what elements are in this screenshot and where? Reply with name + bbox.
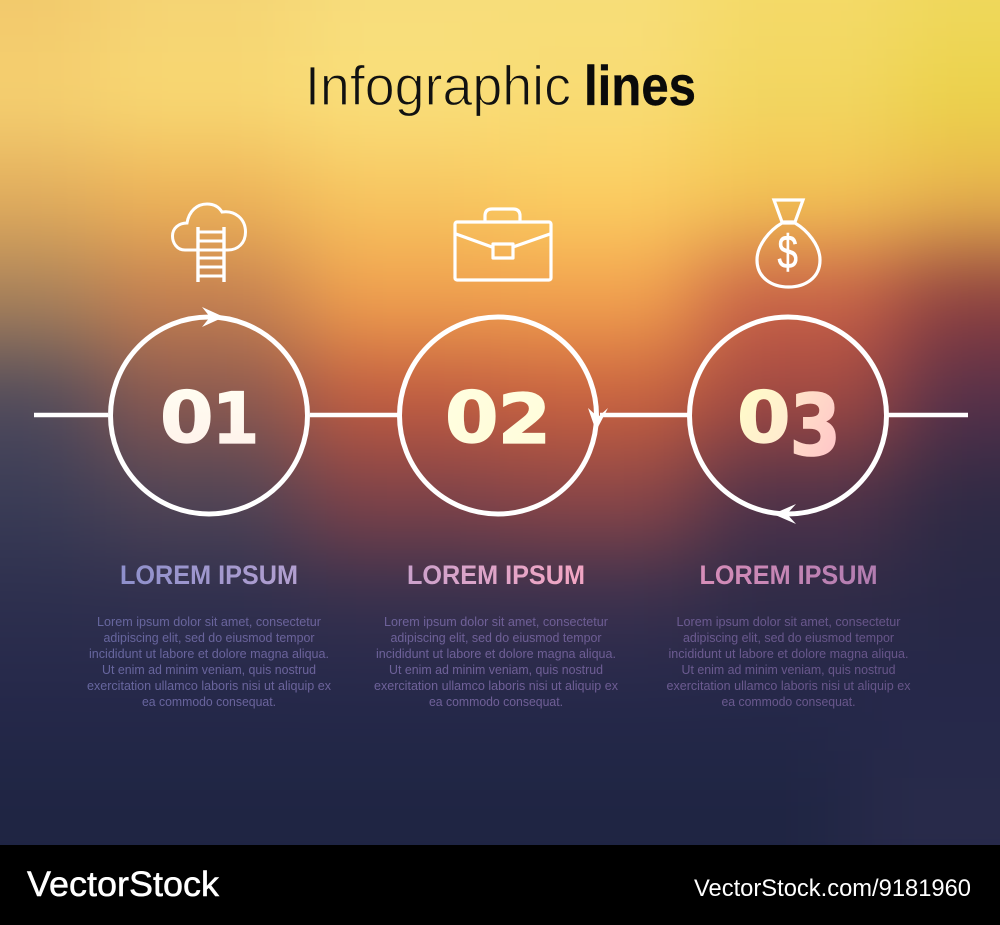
number 03: 0 <box>737 378 791 459</box>
number 03: 3 <box>790 376 841 475</box>
title: lines <box>584 54 696 117</box>
text block: step 3: adipiscing elit, sed do eiusmod tempor <box>683 630 895 645</box>
text block: step 2: adipiscing elit, sed do eiusmod tempor <box>390 630 602 645</box>
icon: money bag <box>757 200 820 287</box>
step 3 circle <box>690 317 886 524</box>
step 1 circle <box>110 307 308 514</box>
arrow: step 3 <box>773 504 796 524</box>
icon: briefcase <box>455 209 551 280</box>
heading: step 2: LOREM IPSUM <box>407 560 585 590</box>
icon: money bag: $ <box>778 226 798 278</box>
connecting timeline line <box>34 413 968 417</box>
number 02: 2 <box>498 380 551 460</box>
footer logo: VectorStock <box>27 865 220 904</box>
text block: step 1: incididunt ut labore et dolore magna aliqua. <box>89 646 329 661</box>
text block: step 2: Ut enim ad minim veniam, quis nostrud <box>389 662 603 677</box>
text block: step 1: Ut enim ad minim veniam, quis nostrud <box>102 662 316 677</box>
heading: step 1: LOREM IPSUM <box>120 560 298 590</box>
number 01: 0 <box>160 378 214 459</box>
text block: step 1: exercitation ullamco laboris nisi ut aliquip ex <box>87 678 331 693</box>
text block: step 1: ea commodo consequat. <box>142 694 276 709</box>
number 01 <box>160 378 259 460</box>
text block: step 3: Ut enim ad minim veniam, quis nostrud <box>682 662 896 677</box>
arrow: step 2 <box>588 408 608 431</box>
step 2 circle <box>400 317 608 514</box>
text block: step 3: exercitation ullamco laboris nisi ut aliquip ex <box>666 678 911 693</box>
text block: step 2: Lorem ipsum dolor sit amet, consectetur <box>384 614 609 629</box>
footer bar <box>0 845 1000 925</box>
title: Infographic <box>305 54 571 117</box>
icon: cloud with ladder <box>172 204 246 282</box>
number 02: 0 <box>445 378 499 459</box>
text block: step 2: ea commodo consequat. <box>429 694 563 709</box>
number 02 <box>445 378 551 460</box>
arrow: step 1 <box>202 307 224 327</box>
text block: step 3: ea commodo consequat. <box>722 694 856 709</box>
text block: step 2: incididunt ut labore et dolore magna aliqua. <box>376 646 616 661</box>
text block: step 3: Lorem ipsum dolor sit amet, consectetur <box>676 614 901 629</box>
text block: step 2: exercitation ullamco laboris nisi ut aliquip ex <box>374 678 618 693</box>
text block: step 1: Lorem ipsum dolor sit amet, consectetur <box>97 614 322 629</box>
text block: step 2 <box>374 614 618 709</box>
text block: step 3: incididunt ut labore et dolore magna aliqua. <box>668 646 908 661</box>
text block: step 1 <box>87 614 331 709</box>
text block: step 3 <box>666 614 911 709</box>
number 01: 1 <box>212 379 259 460</box>
heading: step 3: LOREM IPSUM <box>700 560 878 590</box>
number 03 <box>737 376 841 475</box>
text block: step 1: adipiscing elit, sed do eiusmod tempor <box>104 630 315 645</box>
footer url: VectorStock.com/9181960 <box>694 875 971 902</box>
